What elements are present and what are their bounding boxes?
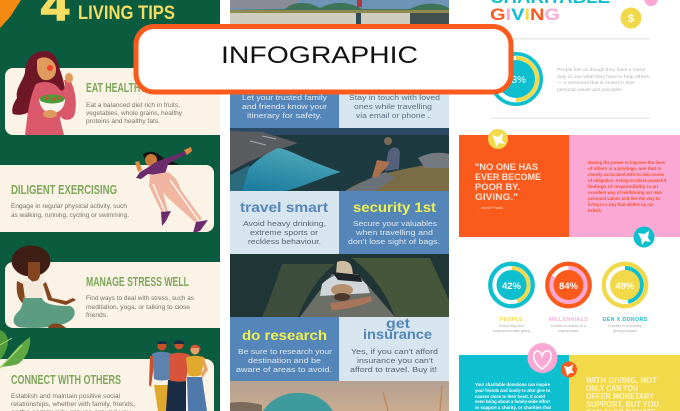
donut: main stat <box>491 54 541 104</box>
block text: your friends and family to also give to <box>475 388 550 393</box>
stat text: — a sentiment that is rooted in their <box>557 80 636 85</box>
stat text: People feel as though they have a moral <box>557 67 645 72</box>
badge: yellow star <box>488 129 508 149</box>
label: gen x donors <box>603 317 648 333</box>
badge: yellow dollar: $ <box>628 13 634 25</box>
cell: tell someone <box>230 24 339 128</box>
cell text: Avoid heavy drinking, <box>243 219 326 228</box>
cell text: extreme sports or <box>250 228 319 237</box>
value: 49% <box>615 281 635 292</box>
card text: Establish and maintain positive social <box>11 394 120 400</box>
illustration: meditating woman <box>12 246 76 328</box>
card text: Find ways to deal with stress, such as <box>86 296 194 302</box>
cell text: Stay in touch with loved <box>349 93 440 102</box>
label: people: PEOPLE <box>500 317 523 323</box>
cell text: aware of areas to avoid. <box>236 365 332 374</box>
label: millennials: regular basis <box>558 329 579 333</box>
card text: as walking, running, cycling or swimming. <box>11 213 129 219</box>
card heading: CONNECT WITH OTHERS <box>11 372 121 387</box>
quote block <box>459 135 569 237</box>
cell text: via email or phone . <box>356 111 430 120</box>
block text: causes close to their heart. It could <box>475 394 545 399</box>
pink text block <box>569 135 680 237</box>
block text: ONLY CAN YOU <box>586 383 638 393</box>
block text: OFFER MONETARY <box>586 391 654 401</box>
label: people <box>493 317 530 333</box>
cell text: Yes, if you can't afford <box>351 347 438 356</box>
quote text: "NO ONE HAS <box>475 162 538 172</box>
donut: millennials 84% <box>547 264 590 306</box>
block text: of obligation. Acting on these powerful <box>588 178 666 183</box>
block text: even bring about a family-wide effort <box>475 399 550 404</box>
badge: teal star <box>634 226 654 248</box>
block text: Your charitable donations can inspire <box>475 382 550 387</box>
block text: Having the power to improve the lives <box>588 160 666 165</box>
block text: beliefs. <box>588 208 602 213</box>
badge: pink <box>644 0 658 6</box>
card text: Engage in regular physical activity, such <box>11 204 127 210</box>
illustration: runner <box>135 147 208 233</box>
cell text <box>243 219 326 246</box>
quote text: GIVING." <box>475 192 518 202</box>
donut: gen x 49% <box>604 264 646 306</box>
card: diligent exercising <box>0 147 214 233</box>
badge: yellow dollar <box>620 8 642 28</box>
card text <box>11 204 129 219</box>
photo: mountain lake top <box>230 0 449 24</box>
block text: feelings of responsibility is an <box>588 184 658 189</box>
quote text: POOR BY. <box>475 182 520 192</box>
cell heading: get <box>386 315 410 331</box>
label: gen x donors: giving program <box>613 329 637 333</box>
card text: meditation, yoga, or talking to close <box>86 305 191 311</box>
panel: travel tips <box>230 0 449 411</box>
cell text: when travelling and <box>355 228 433 237</box>
card heading: DILIGENT EXERCISING <box>11 182 117 197</box>
label: people: empowered after giving <box>493 329 530 333</box>
label: people: Robot-they feel <box>499 324 524 328</box>
stat text: duty to use what they have to help others <box>557 74 650 79</box>
cell text: don't lose sight of bags. <box>348 237 440 246</box>
yellow text block <box>569 355 680 411</box>
label: millennials: Donate to charity on a <box>551 324 586 328</box>
block text: WITH GIVING, NOT <box>586 375 658 385</box>
cell text: Secure your valuables <box>353 219 437 228</box>
block text: personal values and live the way to <box>588 196 660 201</box>
cell heading <box>363 315 432 342</box>
banner title: INFOGRAPHIC <box>221 42 418 69</box>
cell heading: security 1st <box>353 199 436 215</box>
card text <box>86 296 194 319</box>
card text: vegetables, whole grains, healthy <box>86 111 182 117</box>
card text <box>11 394 135 411</box>
panel: living tips <box>0 0 220 411</box>
block text <box>475 382 551 410</box>
cell text: ones while travelling <box>354 102 432 111</box>
stat text: personal values and principles. <box>557 87 623 92</box>
card: manage stress well <box>5 246 220 328</box>
cell: security 1st <box>339 191 449 254</box>
cell text: Let your trusted family <box>242 93 327 102</box>
cell heading: travel smart <box>240 199 328 215</box>
block text: living in a way that abides by our <box>588 202 654 207</box>
badge: orange star <box>561 362 577 378</box>
label: millennials <box>549 317 588 333</box>
cell: travel smart <box>230 191 339 254</box>
heading: LIVING TIPS <box>78 3 175 24</box>
cell text <box>349 93 440 120</box>
photo: hiker above turquoise lake <box>230 128 449 191</box>
corner accent <box>0 0 21 28</box>
cell text <box>236 347 333 374</box>
block text <box>586 375 659 411</box>
attribution: - Anne Frank <box>479 206 503 210</box>
cell text: insurance you can't <box>357 356 434 365</box>
block text: to support a charity, or charities that <box>475 405 551 410</box>
quote text <box>475 162 541 202</box>
value: 42% <box>502 281 522 292</box>
cell text <box>242 93 328 120</box>
illustration: leaves <box>0 330 30 368</box>
banner: infographic <box>136 26 511 92</box>
illustration: three friends <box>149 340 208 411</box>
cell heading: insurance <box>363 326 432 342</box>
cell text: destination and be <box>248 356 321 365</box>
card: connect with others <box>0 330 214 411</box>
card text: friends. <box>86 313 108 319</box>
label: gen x donors: Enrolled in a monthly <box>608 324 642 328</box>
block text: SUPPORT, BUT YOU <box>586 399 659 409</box>
cell text <box>348 219 440 246</box>
block text: excellent way of reinforcing our own <box>588 190 662 195</box>
label: millennials: MILLENNIALS <box>549 317 588 323</box>
cell text: itinerary for safety. <box>247 111 322 120</box>
cell text: and friends know your <box>242 102 328 111</box>
cell text: reckless behaviour. <box>248 237 321 246</box>
cell text: afford to travel. Buy it! <box>350 365 437 374</box>
block text: of others is a privilege, one that is <box>588 166 662 171</box>
donut: people 42% <box>490 264 533 306</box>
card heading: MANAGE STRESS WELL <box>86 274 189 289</box>
card text: Eat a balanced diet rich in fruits, <box>86 103 180 109</box>
card: eat healthy <box>5 51 220 135</box>
cell text <box>350 347 438 374</box>
stat text <box>557 67 650 92</box>
cell: do research <box>230 317 339 381</box>
value: 84% <box>559 281 579 292</box>
card text: relationships, whether with family, friends, <box>11 402 135 408</box>
heading: GIVING <box>490 5 560 24</box>
card heading: EAT HEALTHY <box>86 80 146 95</box>
cell heading: do research <box>242 327 327 343</box>
block text: closely associated with its twin sense <box>588 172 665 177</box>
stat value: 53% <box>506 75 526 86</box>
cell: get insurance <box>339 315 449 381</box>
card text <box>86 103 182 125</box>
cell text: Be sure to research your <box>238 347 333 356</box>
photo: tent at sunset <box>230 381 449 411</box>
illustration: woman eating salad <box>12 51 76 135</box>
badge: pink heart <box>528 343 558 373</box>
card text: proteins and healthy fats. <box>86 119 160 125</box>
block text <box>588 160 666 213</box>
heading <box>490 0 610 24</box>
panel: charitable giving <box>450 0 680 411</box>
photo: person lying on boardwalk <box>230 254 449 317</box>
cell: stay in touch <box>339 24 449 128</box>
teal text block <box>459 355 569 411</box>
label: gen x donors: GEN X DONORS <box>603 317 648 323</box>
quote text: EVER BECOME <box>475 172 541 182</box>
